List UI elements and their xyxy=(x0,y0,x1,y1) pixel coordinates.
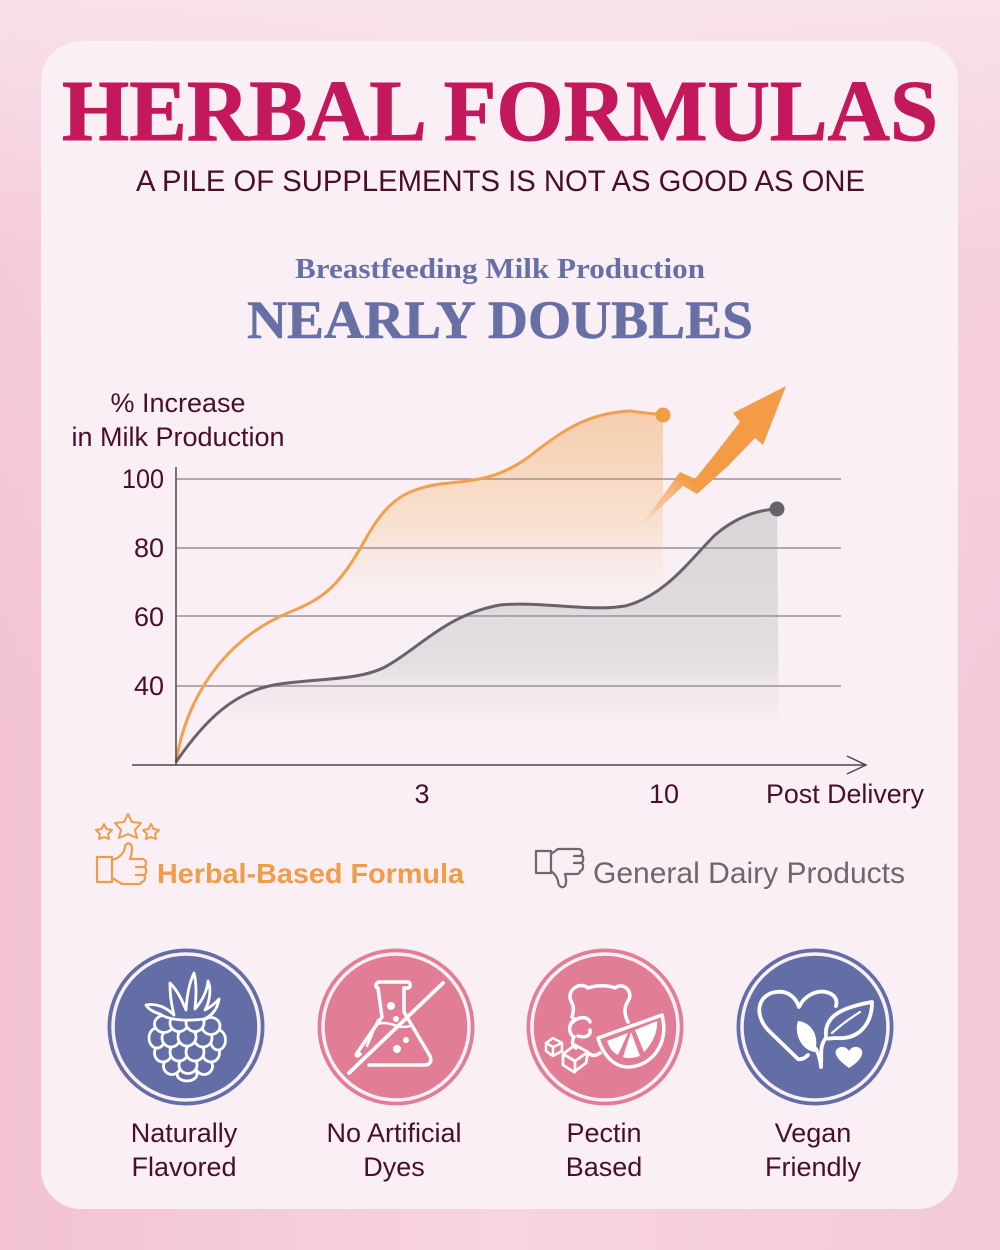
badge: vegan friendly xyxy=(736,948,894,1182)
badge: pectin based xyxy=(526,948,684,1182)
legend label: Herbal-Based Formula xyxy=(157,858,464,889)
x axis labels: 10 xyxy=(649,779,679,809)
label: Vegan xyxy=(775,1118,851,1148)
icon: raspberry xyxy=(108,948,264,1106)
x axis labels xyxy=(414,779,924,809)
label xyxy=(765,1118,862,1182)
label: Friendly xyxy=(765,1152,862,1182)
title: HERBAL FORMULAS xyxy=(62,62,938,159)
label: Pectin xyxy=(566,1118,642,1148)
legend: herbal-based formula xyxy=(96,814,464,889)
axis title xyxy=(71,388,285,452)
y axis labels xyxy=(122,464,164,701)
gray area xyxy=(176,509,779,762)
label: Dyes xyxy=(363,1152,425,1182)
label xyxy=(326,1118,462,1182)
label: No Artificial xyxy=(326,1118,462,1148)
icon: gummy bear and citrus xyxy=(526,948,684,1106)
label xyxy=(566,1118,642,1182)
orange line xyxy=(176,411,663,762)
icon: thumbs down xyxy=(536,849,583,887)
gray line xyxy=(176,509,777,762)
chart heading xyxy=(247,254,753,350)
y axis labels: 80 xyxy=(134,533,164,563)
axis title: % Increase xyxy=(110,388,246,418)
label: Naturally xyxy=(131,1118,238,1148)
axes xyxy=(132,467,866,774)
y axis labels: 100 xyxy=(122,464,164,494)
orange area xyxy=(176,411,663,762)
y axis labels: 40 xyxy=(134,671,164,701)
x axis labels: Post Delivery xyxy=(766,779,924,809)
icon: heart and leaves xyxy=(736,948,894,1106)
axis title: in Milk Production xyxy=(71,422,285,452)
orange end dot xyxy=(656,408,670,422)
chart heading: Breastfeeding Milk Production xyxy=(295,254,705,285)
x axis labels: 3 xyxy=(414,779,430,809)
badge: naturally flavored xyxy=(108,948,264,1182)
grid lines xyxy=(176,479,841,686)
subtitle: A PILE OF SUPPLEMENTS IS NOT AS GOOD AS ONE xyxy=(136,165,865,198)
legend: general dairy products xyxy=(536,849,905,890)
y axis labels: 60 xyxy=(134,602,164,632)
label xyxy=(131,1118,238,1182)
label: Flavored xyxy=(131,1152,237,1182)
icon: crossed flask xyxy=(318,948,474,1106)
icon: three stars xyxy=(96,814,159,839)
chart heading: NEARLY DOUBLES xyxy=(247,290,753,350)
gray end dot xyxy=(770,502,784,516)
icon: thumbs up xyxy=(97,843,146,884)
area chart xyxy=(71,386,924,809)
badge: no artificial dyes xyxy=(318,948,474,1182)
rising arrow xyxy=(640,386,786,527)
legend label: General Dairy Products xyxy=(593,857,905,890)
label: Based xyxy=(566,1152,642,1182)
